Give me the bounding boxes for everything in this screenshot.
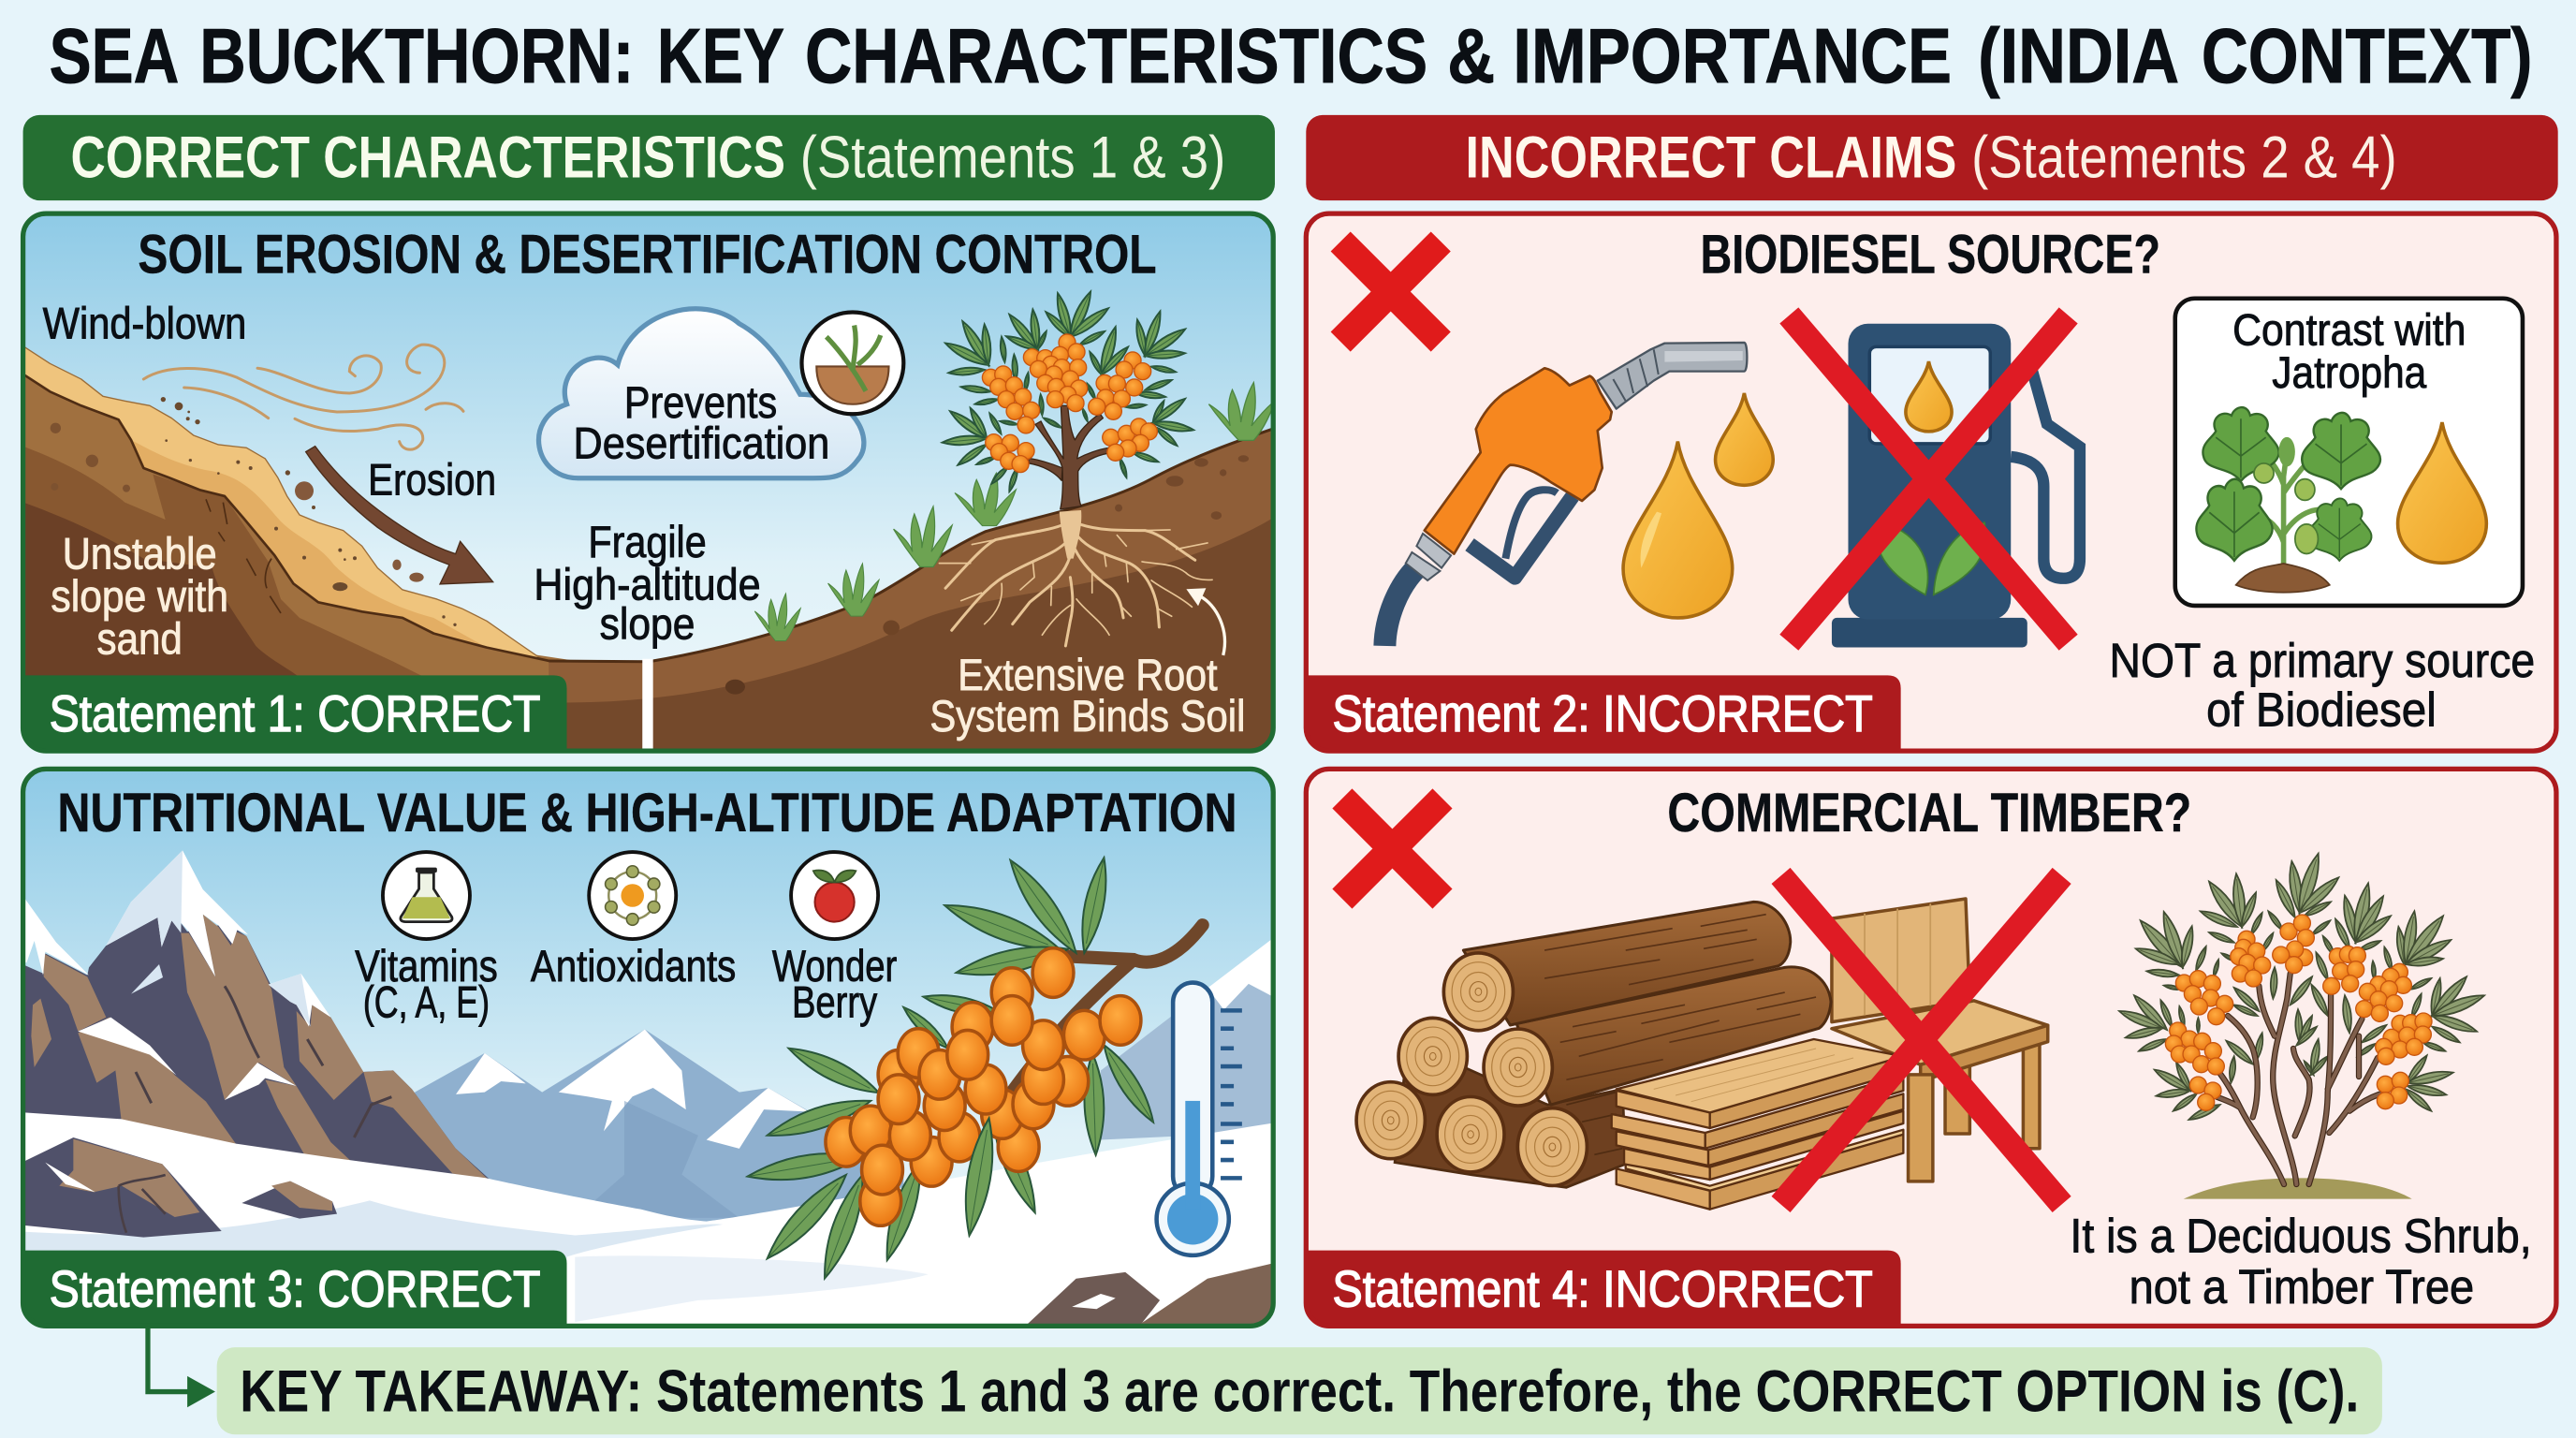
title: & (1447, 13, 1495, 99)
panel 1 labels: Erosion (368, 455, 496, 505)
terrain: valley and root hill (549, 426, 1281, 754)
panel: commercial timber (1306, 769, 2556, 1326)
icon: red cross (1342, 799, 1442, 899)
panel 3 labels (50, 783, 1237, 1317)
panel 3 labels: (C, A, E) (363, 977, 490, 1027)
pointer: fragile slope (642, 659, 653, 751)
icon: big red cross over pump (1789, 315, 2069, 642)
column header: incorrect claims: INCORRECT CLAIMS (1466, 125, 1956, 191)
panel 4 labels (1332, 783, 2532, 1317)
column header: correct characteristics: CORRECT CHARACTERISTICS (70, 125, 785, 191)
panel 4 labels: It is a Deciduous Shrub, (2070, 1209, 2532, 1262)
panel 4 labels: not a Timber Tree (2130, 1260, 2474, 1313)
cloud: prevents desertification (539, 309, 903, 478)
panel 1 labels: Unstable (63, 529, 217, 579)
panel 1 labels: Fragile (588, 518, 707, 567)
icon: thermometer (1157, 983, 1242, 1255)
title: BUCKTHORN: (199, 13, 634, 99)
panel 1 labels: slope with (51, 572, 228, 622)
icon: fuel nozzle and droplets (1384, 343, 1773, 646)
panel: soil erosion and desertification control (21, 212, 1276, 754)
panel 3 labels: Wonder (772, 942, 897, 991)
panel 1 labels: Extensive Root (958, 651, 1218, 700)
panel 2 labels: Statement 2: INCORRECT (1332, 685, 1873, 742)
column header: incorrect claims (1306, 115, 2558, 200)
panel 3 labels: Berry (792, 977, 877, 1027)
callout: contrast with jatropha (2175, 299, 2523, 606)
column header: correct characteristics (23, 115, 1275, 200)
panel 1 labels: Desertification (574, 419, 829, 469)
callout: contrast with jatropha: Contrast with (2232, 306, 2466, 356)
big rocky mountain (19, 850, 490, 1181)
arrow: root callout (1186, 588, 1224, 655)
panel 1 labels: slope (600, 600, 695, 650)
icon: sea buckthorn shrub (2117, 852, 2486, 1199)
panel 3 labels: Vitamins (355, 942, 498, 991)
panel 1 labels: sand (97, 615, 183, 665)
panel 1 labels: High-altitude (534, 561, 761, 610)
panel 1 labels: Prevents (624, 378, 777, 428)
leaves (942, 290, 1194, 492)
panel: nutritional value and high-altitude adaptation (11, 769, 1281, 1330)
grass tufts (754, 383, 1275, 640)
panel 2 labels (1332, 224, 2535, 742)
panel 3 labels: NUTRITIONAL VALUE & HIGH-ALTITUDE ADAPTATION (57, 783, 1237, 844)
column header: correct characteristics: (Statements 1 & 3) (800, 125, 1225, 191)
distant blue mountains (415, 932, 1281, 1226)
soil blotches (1115, 455, 1249, 520)
title (50, 13, 2532, 99)
icon: stacked logs and planks (1356, 902, 1903, 1210)
title: SEA (50, 13, 179, 99)
panel 1 labels: System Binds Soil (929, 692, 1245, 741)
berries (982, 334, 1157, 473)
title: CHARACTERISTICS (805, 13, 1427, 99)
icon: jatropha plant (2196, 407, 2380, 593)
column header: incorrect claims: (Statements 2 & 4) (1971, 125, 2397, 191)
wind swirls (143, 345, 463, 449)
icon: wooden chair (1832, 899, 2048, 1181)
icon: fuel pump (1832, 324, 2080, 648)
panel 1 labels: Statement 1: CORRECT (50, 685, 540, 742)
panel 3 labels: Antioxidants (531, 942, 736, 991)
roots (939, 510, 1212, 646)
sea buckthorn tree with roots (939, 290, 1249, 655)
foreground rocks (19, 1137, 337, 1238)
panel: biodiesel source (1306, 213, 2556, 751)
icon: seedling in soil (801, 312, 903, 414)
icon: red cross (1340, 242, 1441, 342)
snow ground (11, 1111, 1281, 1330)
key takeaway banner (217, 1347, 2382, 1434)
title: KEY (657, 13, 784, 99)
panel 2 labels: of Biodiesel (2206, 683, 2437, 737)
label tab: statement 1 (23, 675, 567, 751)
icon: vitamins flask (383, 852, 470, 939)
icon: antioxidants molecule (589, 852, 676, 939)
panel 2 labels: NOT a primary source (2110, 634, 2535, 687)
panel 1 labels (43, 224, 1245, 742)
icon: big red cross over timber (1781, 875, 2062, 1204)
panel 1 labels: SOIL EROSION & DESERTIFICATION CONTROL (138, 224, 1157, 285)
panel 2 labels: BIODIESEL SOURCE? (1701, 224, 2160, 285)
panel 1 labels: Wind-blown (43, 300, 246, 349)
berries (2165, 915, 2432, 1110)
callout: contrast with jatropha: Jatropha (2272, 348, 2427, 398)
arrow: erosion (306, 447, 493, 584)
terrain: eroding slope with sand (25, 343, 569, 676)
label tab: statement 2 (1306, 675, 1901, 751)
trunk (1028, 405, 1109, 509)
panel 3 labels: Statement 3: CORRECT (50, 1260, 540, 1317)
arrow: connector to key takeaway (148, 1326, 215, 1407)
label tab: statement 4 (1306, 1251, 1901, 1326)
stems (2217, 974, 2380, 1184)
leaves (2117, 852, 2486, 1123)
panel 4 labels: Statement 4: INCORRECT (1332, 1260, 1873, 1317)
label tab: statement 3 (23, 1251, 567, 1326)
icon: oil drop (2398, 422, 2486, 563)
title: IMPORTANCE (1513, 13, 1952, 99)
title: (INDIA (1978, 13, 2179, 99)
icon: wonder berry (791, 852, 878, 939)
sea buckthorn branch with berries (746, 854, 1203, 1282)
panel 4 labels: COMMERCIAL TIMBER? (1667, 783, 2191, 844)
